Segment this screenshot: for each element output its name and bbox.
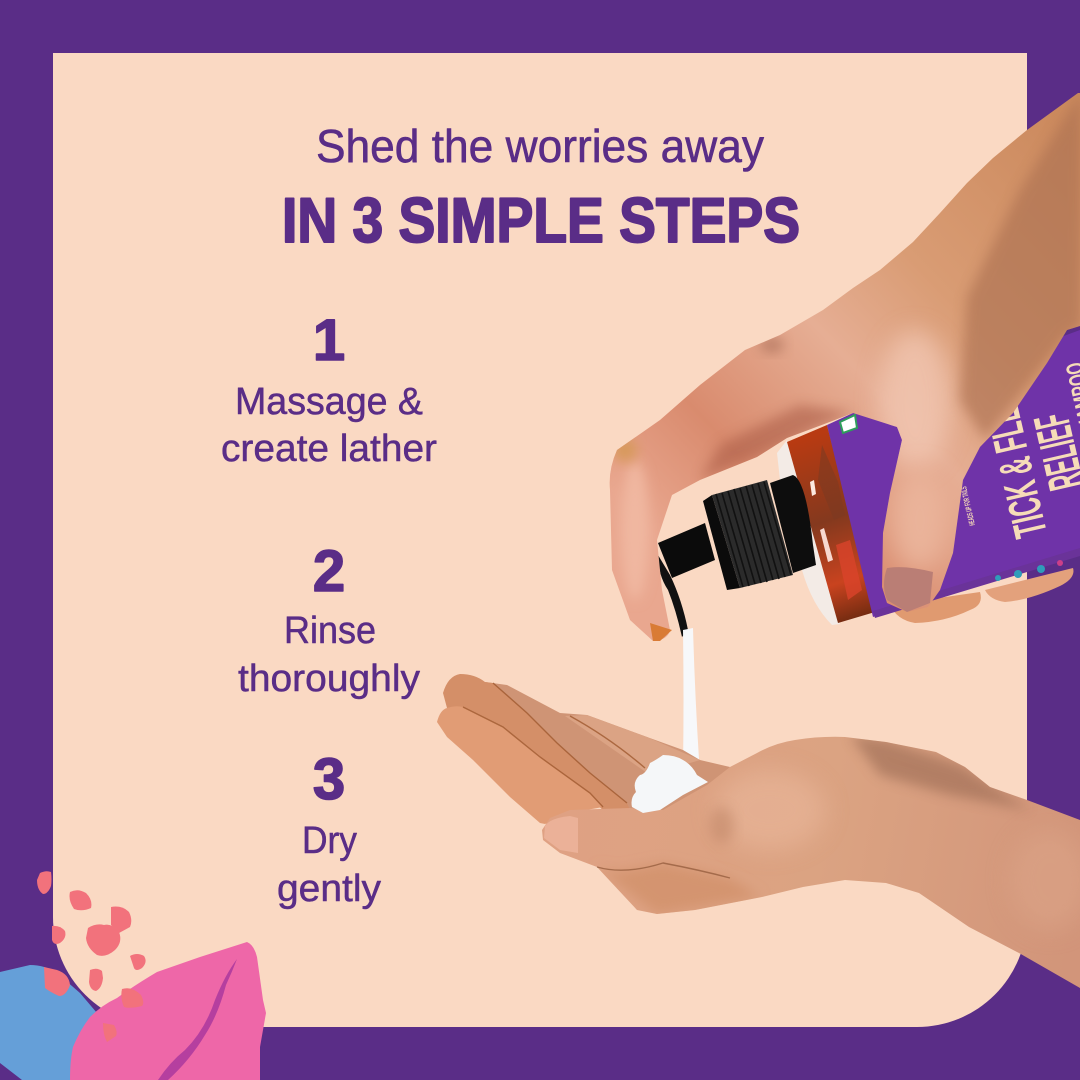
thumb nail (544, 816, 578, 853)
headline: IN 3 SIMPLE STEPS (282, 186, 800, 256)
palm and thumb (542, 737, 1080, 988)
white bottle base (777, 440, 840, 625)
amber bottle shoulder (787, 425, 875, 623)
decorative leaves and petals (0, 871, 266, 1080)
shampoo foam (632, 755, 708, 813)
thumbnail (884, 567, 933, 612)
pump nozzle (658, 523, 715, 578)
step 3 text: gently (277, 868, 381, 910)
collar rim (703, 495, 740, 590)
step number 2: 2 (313, 539, 345, 604)
product name text (959, 360, 1080, 542)
ring and little fingers (485, 682, 730, 812)
step 3 (277, 747, 381, 910)
upper hand holding bottle (610, 90, 1080, 641)
finger creases (463, 683, 645, 807)
pump spout (658, 555, 688, 637)
coral petals (37, 871, 146, 1042)
shampoo bottle (658, 330, 1080, 637)
palm crease (597, 863, 730, 878)
purple label (827, 330, 1080, 617)
hand shading (613, 90, 1080, 600)
step number 1: 1 (313, 308, 345, 373)
fingernail tip (650, 623, 672, 641)
leaf vein (158, 959, 237, 1080)
subtitle line: Shed the worries away (316, 120, 764, 172)
title (282, 120, 800, 256)
fingers behind bottle (890, 568, 1073, 623)
pump neck (770, 475, 816, 573)
illustration: hands and bottle (437, 90, 1080, 988)
label bottom band (873, 548, 1080, 618)
step 1 (221, 308, 437, 470)
palm shading (610, 738, 1075, 914)
step 2 text: thoroughly (238, 658, 420, 700)
step number 3: 3 (313, 747, 345, 812)
lower hand receiving shampoo (437, 674, 1080, 988)
step 2 text: Rinse (284, 610, 376, 652)
step 2 text (238, 610, 420, 700)
little finger lit side (565, 715, 700, 775)
step 1 text: create lather (221, 428, 437, 470)
step 1 text (221, 381, 437, 470)
step 2 (238, 539, 420, 700)
step 1 text: Massage & (235, 381, 423, 423)
product name text: TICK & FLEA (972, 385, 1057, 542)
index finger (437, 706, 603, 824)
pink leaf (70, 942, 266, 1080)
middle finger (443, 674, 630, 810)
label dots (995, 560, 1063, 581)
amber reflections (810, 445, 862, 600)
step 3 text: Dry (302, 820, 357, 862)
index finger and back of hand (610, 93, 1080, 641)
blue leaf (0, 965, 97, 1080)
step 3 text (277, 820, 381, 910)
ribbed collar (712, 480, 793, 588)
shampoo stream (683, 628, 700, 775)
product name text: HEADS UP FOR TAILS (959, 485, 977, 527)
veg mark (840, 415, 857, 433)
